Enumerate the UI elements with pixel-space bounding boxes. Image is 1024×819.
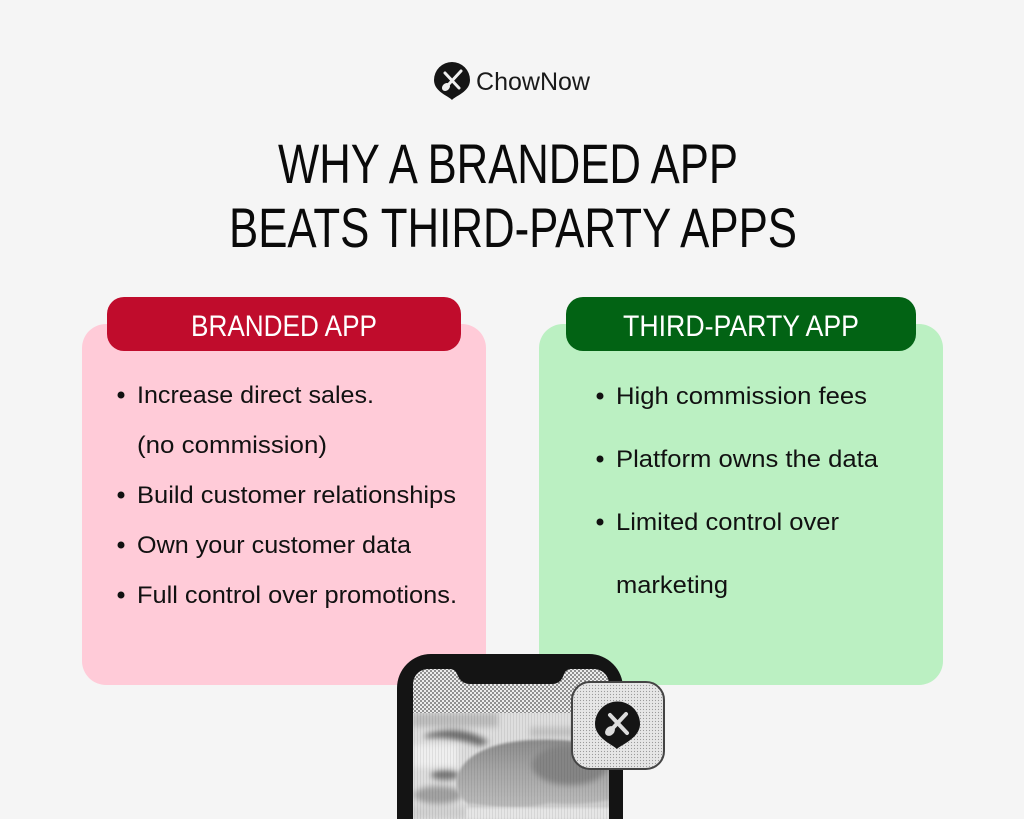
title: WHY A BRANDED APP bbox=[278, 132, 738, 195]
list: third-party drawbacks: marketing bbox=[616, 572, 728, 599]
list: third-party drawbacks bbox=[596, 383, 879, 599]
logo bbox=[434, 62, 591, 100]
phone illustration bbox=[397, 654, 623, 819]
title: BEATS THIRD-PARTY APPS bbox=[229, 196, 797, 259]
list: branded app benefits: Increase direct sales. bbox=[137, 382, 374, 409]
wordmark: ChowNow bbox=[476, 68, 591, 96]
icon: badge pin bbox=[595, 702, 640, 749]
heading: branded app bbox=[107, 297, 461, 351]
panel: branded app bbox=[82, 297, 486, 685]
burger photo bbox=[413, 713, 612, 819]
list: branded app benefits: Own your customer data bbox=[137, 532, 412, 559]
list: third-party drawbacks: Limited control over bbox=[616, 509, 839, 536]
heading: branded app: BRANDED APP bbox=[191, 310, 377, 343]
app badge bbox=[572, 682, 664, 769]
list: branded app benefits: Full control over promotions. bbox=[137, 582, 457, 609]
list: third-party drawbacks: Platform owns the data bbox=[616, 446, 879, 473]
heading: third-party app bbox=[566, 297, 916, 351]
panel background bbox=[82, 324, 486, 685]
list: branded app benefits: (no commission) bbox=[137, 432, 327, 459]
list: branded app benefits: Build customer relationships bbox=[137, 482, 456, 509]
list: branded app benefits bbox=[118, 382, 457, 609]
panel: third-party app bbox=[539, 297, 943, 685]
panel background bbox=[539, 324, 943, 685]
heading: third-party app: THIRD-PARTY APP bbox=[623, 310, 859, 343]
title bbox=[229, 132, 797, 259]
list: third-party drawbacks: High commission fees bbox=[616, 383, 867, 410]
icon: ChowNow pin bbox=[434, 62, 470, 100]
phone body bbox=[397, 654, 623, 819]
phone screen halftone bbox=[413, 669, 609, 713]
